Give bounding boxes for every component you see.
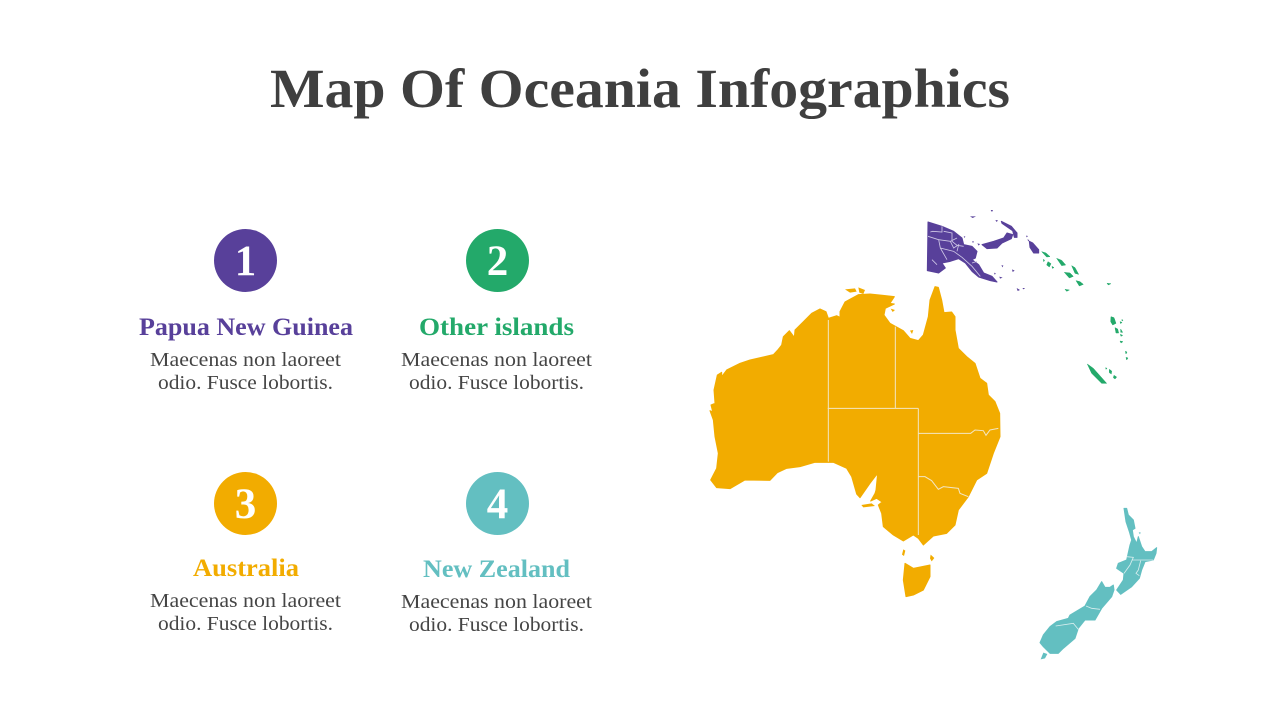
panel: New Zealand (401, 472, 592, 636)
text block: Maecenas non laoreet (401, 349, 592, 371)
map: Papua New Guinea (927, 210, 1039, 291)
number badge 3: 3 (235, 481, 256, 528)
number badge 1: 1 (235, 238, 256, 285)
map: Australia (710, 287, 1000, 597)
number badge 2: 2 (487, 238, 508, 285)
panel: Other islands (401, 229, 592, 394)
text block: Maecenas non laoreet (401, 591, 592, 613)
panel: Papua New Guinea (139, 229, 354, 394)
map: New Zealand (1040, 508, 1157, 659)
South Island (1040, 582, 1114, 659)
number badge 4 (466, 472, 529, 535)
map: other islands (1042, 252, 1128, 383)
text block: Maecenas non laoreet (150, 349, 341, 371)
text block: odio. Fusce lobortis. (158, 372, 333, 394)
text block (401, 591, 592, 636)
number badge 1 (214, 229, 277, 292)
heading: Australia: Australia (193, 555, 300, 582)
text block (401, 349, 592, 394)
title: Map Of Oceania Infographics (270, 58, 1010, 119)
text block: Maecenas non laoreet (150, 590, 341, 612)
number badge 4: 4 (487, 481, 508, 528)
North Island (1117, 508, 1157, 594)
text block (150, 590, 341, 635)
panel: Australia (150, 472, 341, 635)
heading: Other islands: Other islands (419, 314, 574, 341)
heading: Papua New Guinea: Papua New Guinea (139, 314, 354, 341)
number badge 2 (466, 229, 529, 292)
text block (150, 349, 341, 394)
number badge 3 (214, 472, 277, 535)
heading: New Zealand: New Zealand (423, 556, 570, 583)
text block: odio. Fusce lobortis. (409, 614, 584, 636)
text block: odio. Fusce lobortis. (409, 372, 584, 394)
text block: odio. Fusce lobortis. (158, 613, 333, 635)
